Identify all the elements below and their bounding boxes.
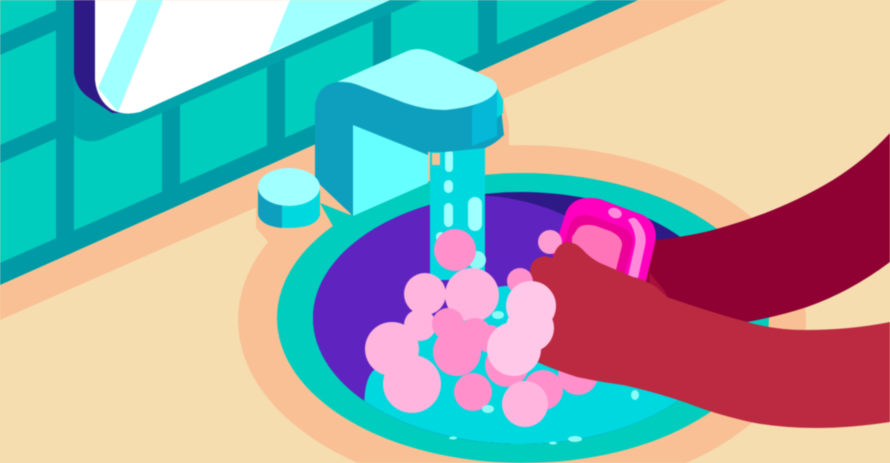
water stream: [430, 148, 485, 280]
soap bubbles: [365, 229, 639, 444]
sink outer rim: [238, 98, 806, 463]
sink basin: [312, 191, 680, 444]
soap dispenser dish: [258, 168, 320, 228]
back arm: [640, 133, 890, 322]
small bubble behind soap: [538, 230, 562, 254]
faucet: [315, 49, 504, 216]
tiled wall: [0, 0, 640, 285]
front arm and hand: [530, 242, 890, 428]
foam on hand: [487, 281, 556, 376]
counter edge strip: [0, 0, 728, 320]
bar of soap: [553, 198, 656, 285]
mirror: [74, 0, 400, 114]
sink teal rim: [277, 173, 769, 463]
